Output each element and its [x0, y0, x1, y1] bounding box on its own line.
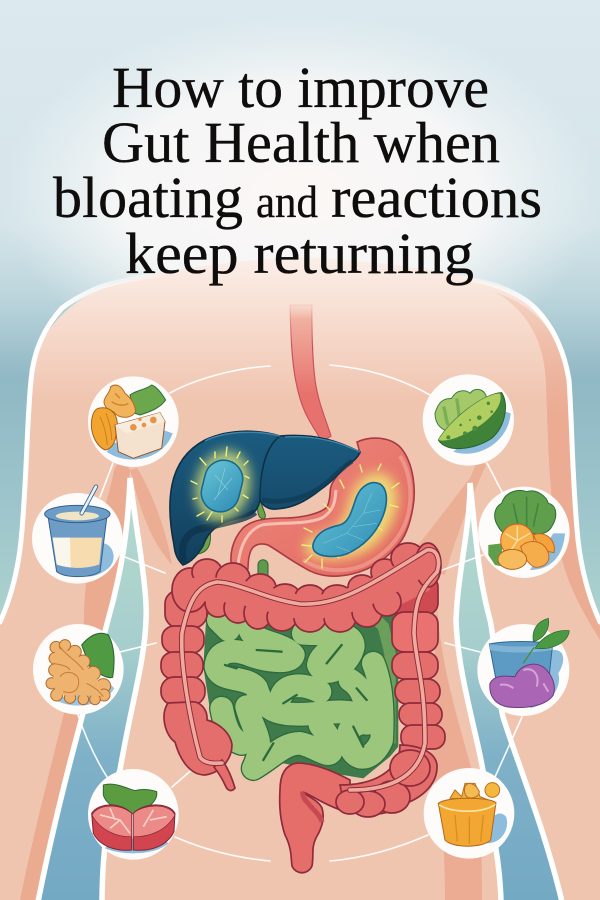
title: and: [256, 177, 318, 227]
ascending haustra: [161, 590, 235, 791]
food icon: yogurt cup: [32, 487, 123, 584]
leaf: [130, 385, 166, 415]
body silhouette: [0, 257, 600, 900]
arm gap left: [38, 478, 146, 900]
bacterium: liver: [188, 445, 258, 527]
shell: [91, 408, 117, 450]
small intestine: [203, 607, 398, 778]
food icon: tofu, pastry and greens: [88, 376, 179, 467]
food icon: crumbly nugget and leaf: [33, 624, 124, 715]
title: bloating: [53, 165, 243, 230]
taenia band: [182, 550, 439, 790]
large intestine: [161, 543, 445, 873]
food icon: blueberry cup and purple blob: [477, 618, 569, 716]
background glow behind title: [0, 0, 600, 420]
muscle shading: [20, 462, 130, 900]
intestine loops: [216, 620, 382, 768]
body white outlines: [0, 272, 600, 900]
title: reactions: [331, 165, 542, 230]
title: [53, 55, 542, 286]
arm gap right: [456, 483, 564, 900]
transverse haustra: [172, 543, 441, 632]
title: How to improve: [112, 55, 489, 120]
title: Gut Health when: [102, 110, 500, 175]
food icon: cucumber and lettuce: [423, 374, 514, 466]
tofu: [115, 413, 165, 458]
stomach: [231, 438, 414, 576]
gallbladder: [192, 495, 268, 575]
title: keep returning: [125, 221, 474, 286]
connector lines: [78, 365, 522, 861]
bacterium: stomach: [302, 464, 399, 568]
food icon: sliced meat and leaf: [88, 769, 179, 860]
rectum and sigmoid: [280, 763, 350, 873]
liver: [170, 431, 360, 565]
esophagus: [290, 305, 331, 442]
pastry: [104, 385, 136, 417]
food icon: golden tub: [424, 768, 514, 859]
food icon: oranges and greens: [478, 487, 570, 578]
descending haustra: [336, 575, 445, 817]
